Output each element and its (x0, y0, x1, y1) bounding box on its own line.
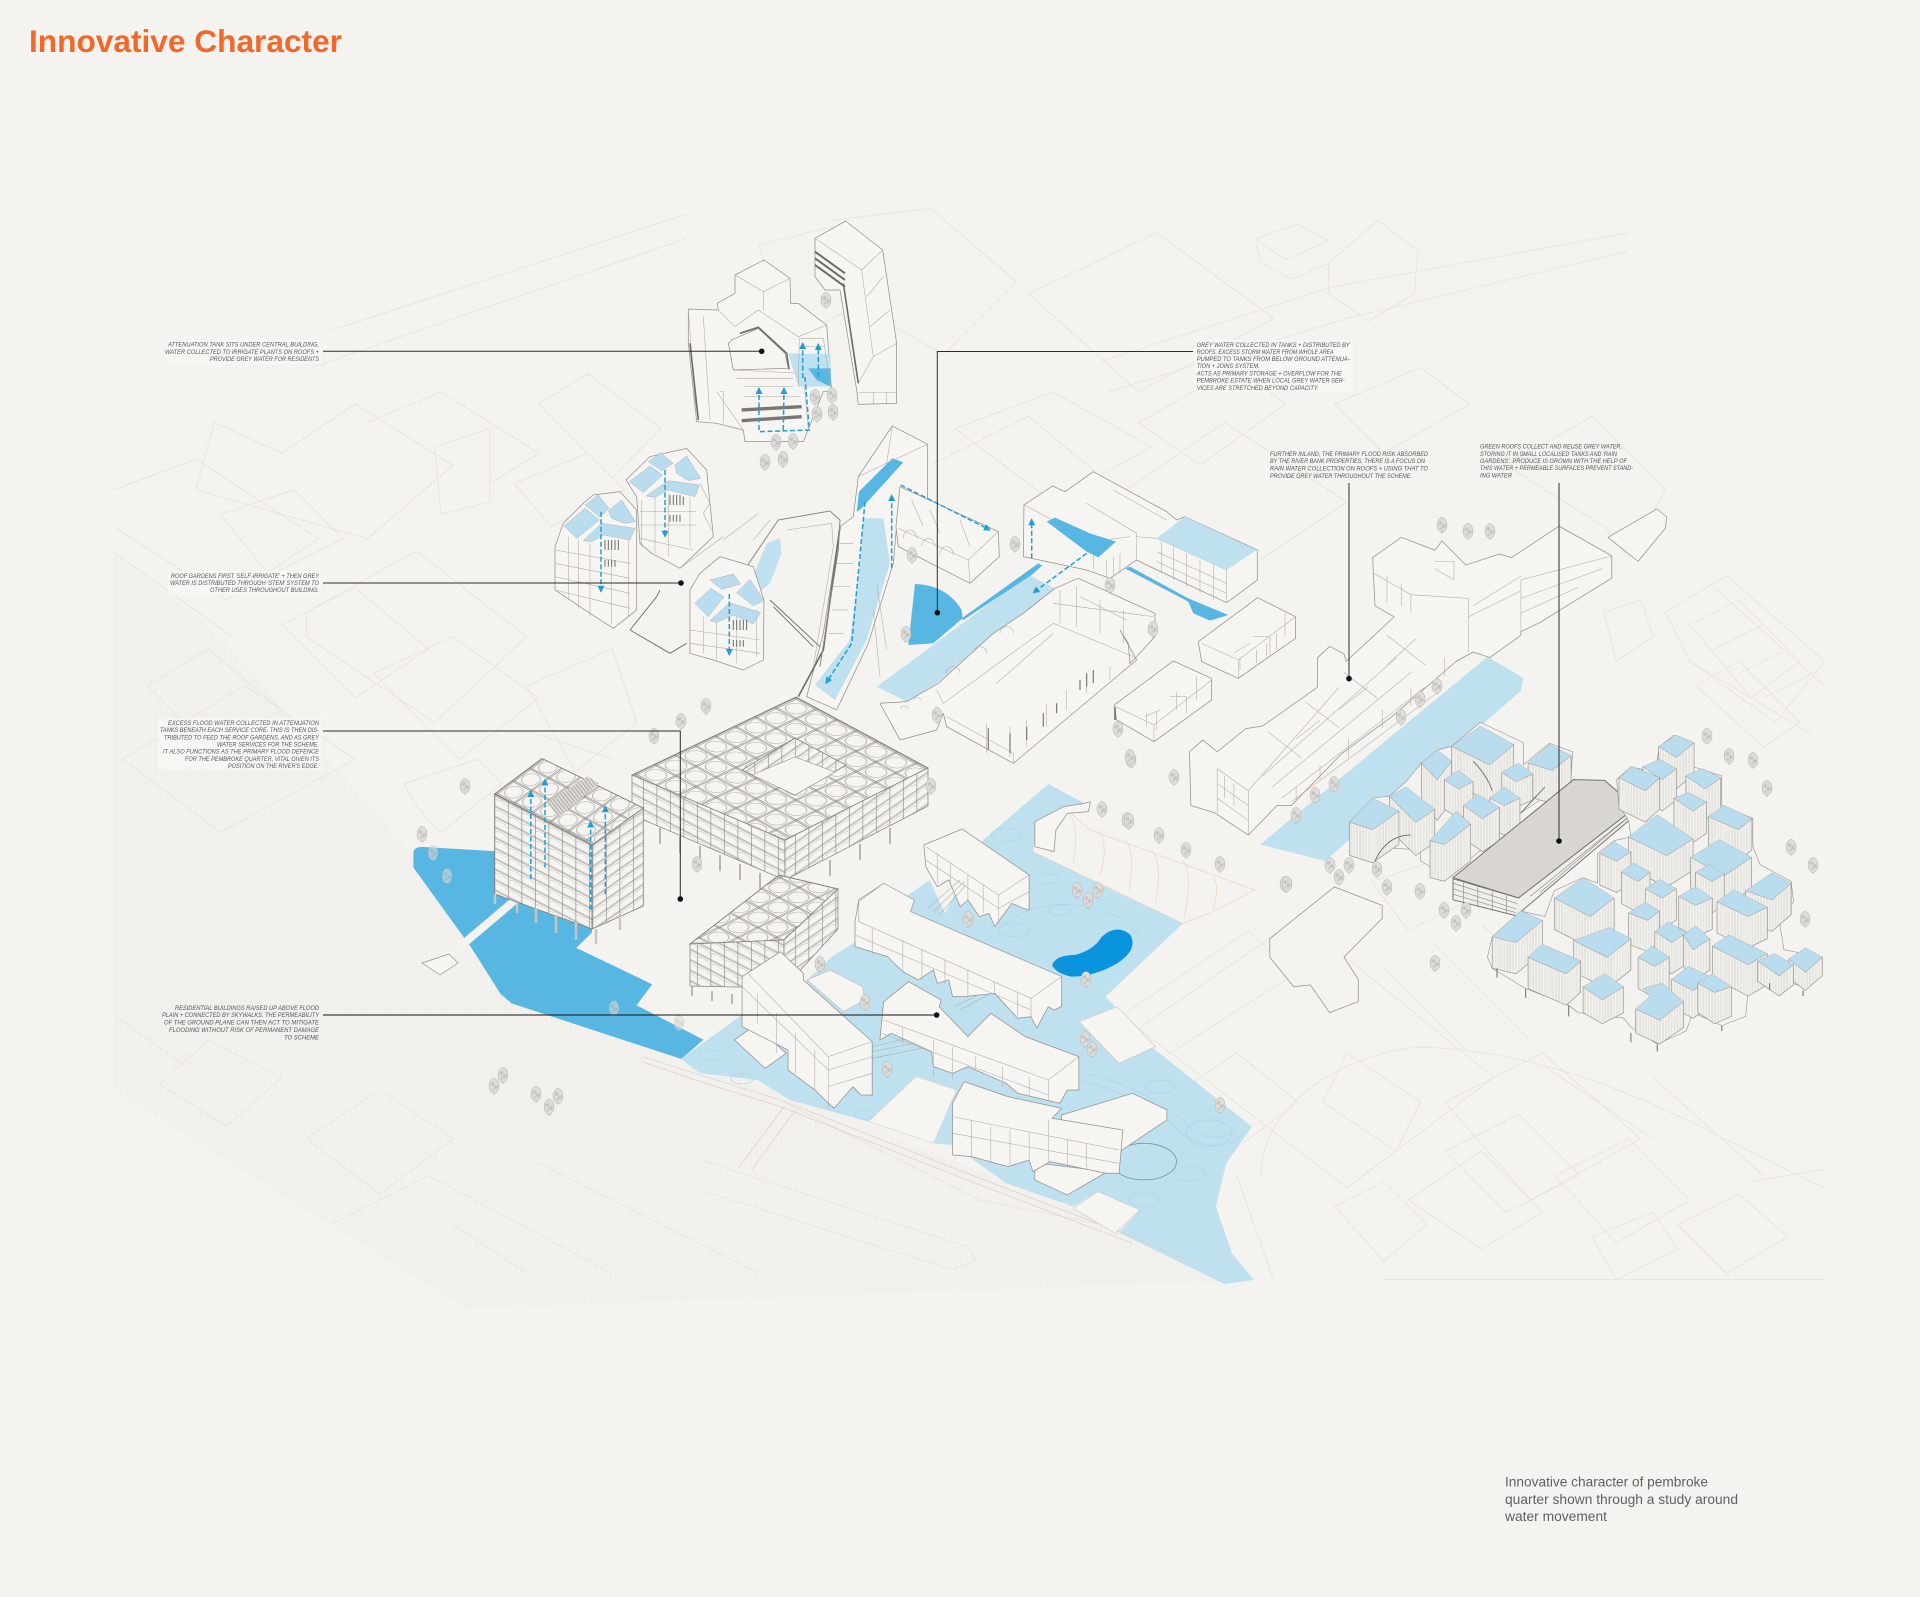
arch-windowed building (896, 487, 999, 583)
callout: excess flood water: POSITION ON THE RIVER'S EDGE. (228, 763, 319, 770)
cluster B base (1487, 735, 1822, 1044)
cluster A base (1350, 722, 1573, 878)
top block: attenuation tank building (688, 221, 897, 442)
tower 3 (690, 557, 764, 670)
callout: residential buildings: RESIDENTIAL BUILDINGS RAISED UP ABOVE FLOOD (175, 1005, 319, 1012)
long terrace building (1189, 509, 1667, 835)
central block (688, 260, 832, 442)
canal beside terrace (1260, 657, 1523, 861)
wedge building (1608, 509, 1667, 561)
callout: further inland: BY THE RIVER BANK PROPERTIES, THERE IS A FOCUS ON (1270, 458, 1425, 465)
river: dark blue water (413, 847, 704, 1059)
callout: green roofs: GARDENS'. PRODUCE IS GROWN WITH THE HELP OF (1480, 458, 1628, 465)
mid block (880, 982, 1079, 1103)
caption: Innovative character of pembroke (1505, 1475, 1708, 1490)
callout: green roofs (1480, 444, 1634, 844)
callout: attenuation tank: ATTENUATION TANK SITS UNDER CENTRAL BUILDING, (167, 342, 319, 348)
callout: grey water tanks: PUMPED TO TANKS FROM BELOW GROUND ATTENUA- (1197, 356, 1350, 363)
caption: quarter shown through a study around (1505, 1492, 1738, 1507)
lower left block (734, 1025, 786, 1068)
callout: further inland: FURTHER INLAND, THE PRIMARY FLOOD RISK ABSORBED (1270, 451, 1428, 458)
callout: further inland (1270, 451, 1428, 681)
callout: excess flood water: IT ALSO FUNCTIONS AS THE PRIMARY FLOOD DEFENCE (163, 748, 320, 756)
cluster A cube facades (1350, 744, 1571, 881)
flood plain residential buildings (734, 829, 1167, 1195)
callout: roof gardens: ROOF GARDENS FIRST 'SELF-IRRIGATE' + THEN GREY (171, 573, 320, 580)
cluster A roofs (1350, 726, 1571, 844)
callout: excess flood water: EXCESS FLOOD WATER COLLECTED IN ATTENUATION (168, 720, 319, 727)
callout: grey water tanks: TION + JOINS SYSTEM. (1197, 363, 1260, 370)
callout: roof gardens (168, 571, 684, 595)
faint surrounding buildings (113, 208, 1825, 1280)
callout: grey water tanks: GREY WATER COLLECTED IN TANKS + DISTRIBUTED BY (1197, 342, 1350, 349)
callout: excess flood water: WATER SERVICES FOR THE SCHEME. (217, 742, 319, 748)
callout: residential buildings: PLAIN + CONNECTED BY SKYWALKS. THE PERMEABILITY (162, 1012, 320, 1019)
caption: water movement (1504, 1509, 1607, 1524)
callout: attenuation tank (165, 340, 764, 364)
trees (417, 292, 1818, 1116)
callout: grey water tanks: ACTS AS PRIMARY STORAGE + OVERFLOW FOR THE (1196, 370, 1342, 378)
callout: excess flood water: TANKS BENEATH EACH SERVICE CORE. THIS IS THEN DIS- (160, 727, 320, 734)
water: river and flood plain (413, 657, 1523, 1284)
concrete frame: courtyard building (632, 697, 928, 889)
callout: residential buildings: OF THE GROUND PLANE CAN THEN ACT TO MITIGATE (164, 1020, 320, 1026)
outer roof grid (632, 697, 928, 840)
skywalk stairs (872, 880, 997, 1058)
callout: grey water tanks: VICES ARE STRETCHED BEYOND CAPACITY. (1197, 385, 1319, 392)
long block below canal (880, 578, 1155, 763)
slab building (815, 221, 897, 404)
flood plain: light blue water (681, 784, 1254, 1284)
arched terrace houses (1033, 807, 1255, 923)
cube housing cluster A (1350, 722, 1573, 881)
callout: residential buildings: FLOODING WITHOUT RISK OF PERMANENT DAMAGE (169, 1027, 320, 1034)
main block (1023, 472, 1257, 603)
bridge jetty (422, 901, 514, 975)
callout: green roofs: GREEN ROOFS COLLECT AND REUSE GREY WATER, (1480, 444, 1622, 450)
ring pond (1111, 1143, 1176, 1180)
callout: grey water tanks (934, 340, 1353, 616)
callout: roof gardens: OTHER USES THROUGHOUT BUILDING. (210, 587, 319, 594)
callout: residential buildings (162, 1005, 939, 1042)
stilts (660, 828, 890, 889)
bottom block annex (1062, 1093, 1167, 1153)
quarter circle attenuation pool (908, 584, 963, 645)
callout: green roofs: ING WATER (1480, 472, 1512, 480)
callout: roof gardens: WATER IS DISTRIBUTED THROUGH 'STEM' SYSTEM TO (170, 580, 319, 587)
callout: attenuation tank: PROVIDE GREY WATER FOR RESIDENTS (210, 356, 319, 363)
upper courtyard building with roof water (880, 472, 1296, 763)
deep pool (1052, 930, 1133, 977)
caption (1504, 1475, 1738, 1524)
concrete frame: lower building (690, 875, 838, 1006)
bottom block (953, 1082, 1123, 1173)
curved path and pond (747, 511, 840, 667)
canal strip beside upper buildings (877, 563, 1228, 702)
market hall barn (1453, 780, 1636, 916)
long block (855, 883, 1062, 1028)
axonometric site context (113, 208, 1825, 1308)
callout: further inland: PROVIDE GREY WATER THROUGHOUT THE SCHEME. (1270, 473, 1412, 480)
context block near road (1270, 887, 1382, 1013)
right face (785, 768, 928, 880)
callout: residential buildings: TO SCHEME (284, 1034, 320, 1042)
title: Innovative Character (29, 23, 342, 59)
promenade and river wall (643, 802, 1255, 1270)
cluster B cubes: facade then roof (1492, 735, 1822, 1044)
concrete frame: tower (495, 758, 643, 944)
courtyard void (742, 738, 846, 795)
small block B (1114, 661, 1212, 742)
callout: green roofs: STORING IT IN SMALL LOCALISED TANKS AND 'RAIN (1480, 451, 1617, 458)
tower 2 (626, 448, 713, 568)
callout: green roofs: THIS WATER + PERMEABLE SURFACES PREVENT STAND- (1480, 465, 1634, 472)
tower 1 (555, 492, 637, 628)
small block A (1198, 598, 1296, 678)
callout: attenuation tank: WATER COLLECTED TO IRRIGATE PLANTS ON ROOFS + (165, 349, 319, 356)
callout: excess flood water: TRIBUTED TO FEED THE ROOF GARDENS, AND AS GREY (164, 734, 320, 742)
water movement arrows (531, 343, 1087, 910)
small waterside block (1035, 802, 1090, 852)
callout: grey water tanks: ROOFS. EXCESS STORM WATER FROM WHOLE AREA (1197, 349, 1334, 356)
cube housing cluster B (1487, 735, 1822, 1051)
long slab building with rooftop water (798, 426, 999, 710)
callout: excess flood water: FOR THE PEMBROKE QUARTER, VITAL GIVEN ITS (185, 756, 320, 763)
callout: excess flood water (158, 718, 683, 902)
left face (632, 775, 785, 880)
upper block (924, 829, 1029, 927)
callout: further inland: RAIN WATER COLLECTION ON ROOFS + USING THAT TO (1270, 466, 1428, 472)
roof garden towers (555, 448, 840, 670)
water features: roof and plaza tanks (877, 563, 1228, 702)
river bank hatching (113, 550, 1250, 1308)
callout: grey water tanks: PEMBROKE ESTATE WHEN LOCAL GREY WATER SER- (1197, 378, 1345, 384)
